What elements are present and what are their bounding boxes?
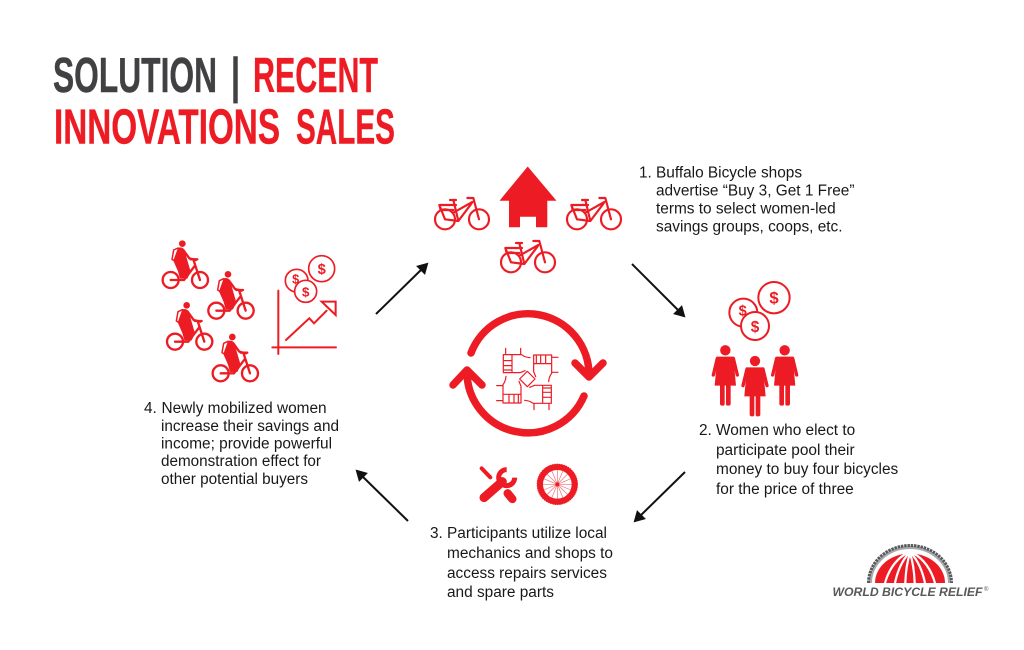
title: INNOVATIONS xyxy=(54,100,280,154)
icon: bicycle wheel xyxy=(537,464,577,504)
icon: women cyclists and growth chart xyxy=(163,240,336,381)
step 4 text xyxy=(144,400,339,488)
center cycle icon xyxy=(453,314,603,433)
title: SOLUTION xyxy=(53,48,217,103)
icon: bicycle right xyxy=(567,198,621,229)
step 2 text: Women who elect to xyxy=(716,422,855,439)
icon: cyclist 2 xyxy=(208,271,254,319)
icon: bicycle left xyxy=(435,198,489,229)
icon: cyclist 1 xyxy=(163,240,208,288)
logo dome xyxy=(868,546,952,583)
icon: women pooling money xyxy=(713,282,797,416)
step 2 text: for the price of three xyxy=(716,481,854,498)
step 4 text: 4. xyxy=(144,400,157,417)
step 1 text: 1. xyxy=(639,164,652,182)
step 4 text: demonstration effect for xyxy=(161,453,321,470)
icon: woman left xyxy=(713,345,737,406)
step 3 text: access repairs services xyxy=(447,565,607,582)
icon: woman middle xyxy=(743,356,767,416)
arrow: step 3 to step 4 xyxy=(357,471,408,521)
step 4 text: income; provide powerful xyxy=(161,436,332,452)
icon: bicycle bottom xyxy=(501,241,555,272)
icon: growth chart xyxy=(272,291,336,354)
step 1 text: terms to select women-led xyxy=(656,200,836,218)
step 2 text: participate pool their xyxy=(716,442,855,459)
logo wordmark: ® xyxy=(984,586,989,593)
step 3 text: 3. xyxy=(430,525,443,542)
step 4 text: increase their savings and xyxy=(161,418,339,435)
icon: four joined hands xyxy=(497,348,558,410)
title: SALES xyxy=(296,100,395,154)
step 1 text: Buffalo Bicycle shops xyxy=(656,164,802,182)
icon: coins: $ xyxy=(769,289,779,308)
step 3 text: Participants utilize local xyxy=(447,525,607,542)
step 2 text: money to buy four bicycles xyxy=(716,461,899,478)
logo wordmark: WORLD BICYCLE RELIEF xyxy=(832,587,984,599)
step 3 text: and spare parts xyxy=(447,584,554,601)
icon: tools and wheel xyxy=(482,464,577,504)
icon: cyclist 3 xyxy=(167,302,212,350)
arrow: step 4 to step 1 xyxy=(376,264,427,314)
logo: World Bicycle Relief xyxy=(832,546,989,599)
icon: coins: $ xyxy=(739,304,747,320)
arrow: step 2 to step 3 xyxy=(635,472,685,521)
icon: woman right xyxy=(773,345,797,406)
title: RECENT xyxy=(253,48,378,103)
title xyxy=(53,48,395,154)
icon: cyclist 4 xyxy=(213,334,258,381)
step 1 text: savings groups, coops, etc. xyxy=(656,218,842,236)
step 1 text xyxy=(639,164,854,236)
step 2 text: 2. xyxy=(699,422,712,439)
icon: house with three bicycles xyxy=(435,166,621,272)
icon: coins xyxy=(729,282,790,340)
circular arrows xyxy=(453,314,603,433)
icon: chart coins xyxy=(285,256,335,302)
step 2 text xyxy=(699,422,899,498)
icon: coins: $ xyxy=(751,319,760,336)
step 4 text: other potential buyers xyxy=(161,471,308,488)
step 3 text xyxy=(430,525,613,601)
icon: chart coins: $ xyxy=(302,284,310,299)
step 3 text: mechanics and shops to xyxy=(447,545,613,562)
title: | xyxy=(231,48,240,104)
step 4 text: Newly mobilized women xyxy=(162,400,327,417)
icon: chart coins: $ xyxy=(292,272,299,286)
step 1 text: advertise “Buy 3, Get 1 Free” xyxy=(656,182,854,200)
icon: house xyxy=(500,166,556,227)
icon: wrench and screwdriver xyxy=(482,468,515,499)
icon: chart coins: $ xyxy=(318,262,326,278)
arrow: step 1 to step 2 xyxy=(632,264,684,316)
